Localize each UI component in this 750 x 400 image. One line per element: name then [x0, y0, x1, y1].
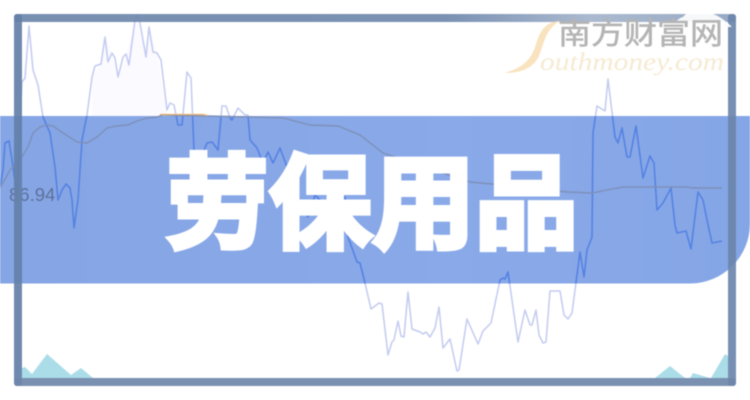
icon: cloud [668, 10, 732, 27]
icon: small mountains bottom right [655, 354, 728, 378]
icon: swoosh S [504, 21, 560, 73]
value label: 86.94 [9, 184, 55, 205]
watermark chinese name: 南方财富网 [558, 9, 723, 53]
icon: small mountains bottom left [22, 354, 93, 378]
blue title band [0, 116, 750, 284]
price line inside the band [0, 116, 722, 284]
watermark: Southmoney logo [504, 9, 732, 76]
title: 劳保用品 [166, 121, 578, 270]
orange segment on moving average [160, 114, 207, 116]
moving average line [0, 115, 722, 193]
watermark latin name: outhmoney.com [540, 49, 724, 76]
